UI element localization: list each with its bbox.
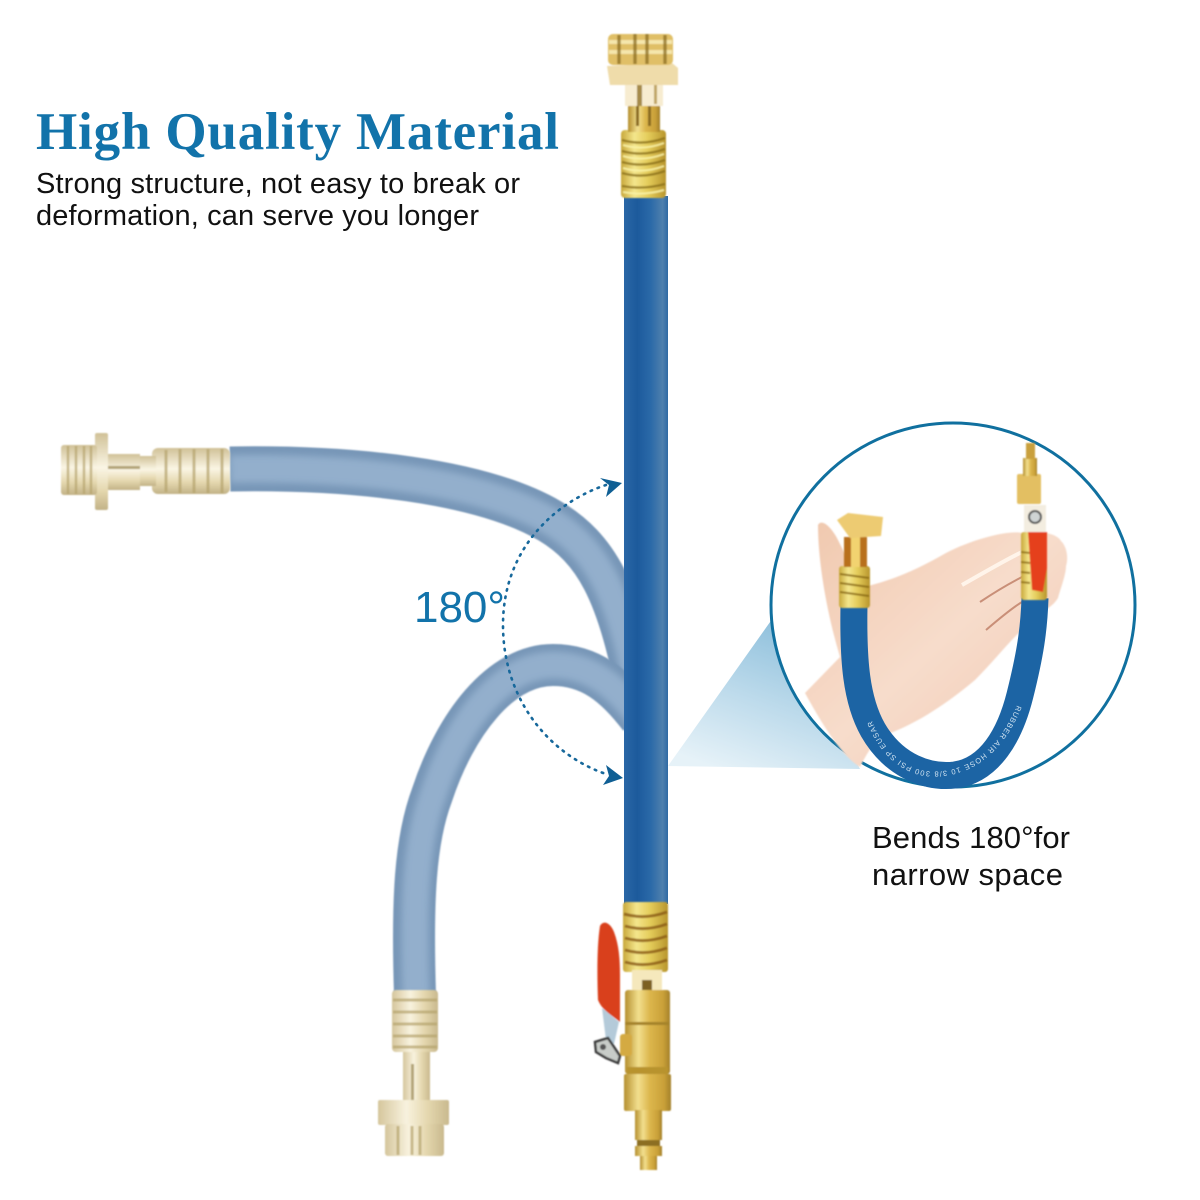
hand [805,523,1067,767]
small hose [854,598,1035,775]
small red handle [1028,532,1047,592]
hose print: RUBBER AIR HOSE 10 3/8 300 PSI SP EUSAR [868,706,1022,777]
ghost hose: upper bent position [61,433,640,700]
ghost hose: lower bent position [378,665,640,1156]
upper arrowhead [600,478,622,497]
bottom brass valve fitting [595,902,671,1170]
caption: bends 180 degrees [872,820,1070,892]
left brass fitting [837,513,883,608]
finger gaps [962,552,1024,630]
180 degree label: 180° [414,583,505,632]
valve stem [620,1034,632,1056]
top brass fitting [607,34,678,198]
silver lever [602,1008,619,1044]
ghost fitting: left end [61,433,230,510]
lower arrowhead [603,765,623,785]
right brass valve [1017,443,1047,600]
description text: Strong structure, not easy to break or [36,168,520,200]
ghost fitting: bottom end [378,990,449,1156]
main hose [624,196,668,904]
caption: bends 180 degrees: Bends 180°for [872,820,1070,855]
callout wedge [668,608,860,769]
description text: deformation, can serve you longer [36,200,479,232]
detail circle [770,422,1136,789]
title: High Quality Material [36,103,559,161]
bend angle arc with arrows [503,478,623,785]
caption: bends 180 degrees: narrow space [872,857,1063,892]
silver nut [595,1038,620,1063]
red valve handle [597,923,620,1022]
description text [36,168,520,232]
